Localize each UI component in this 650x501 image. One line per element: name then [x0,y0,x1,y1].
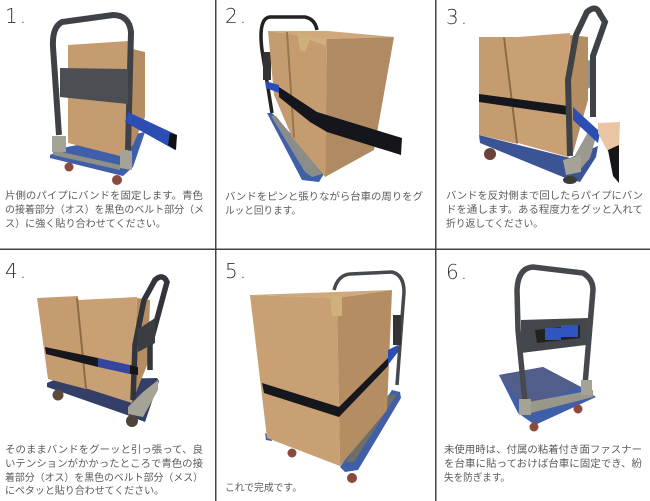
illustration: empty cart with stored fastener [499,267,596,432]
step number 5: 5. [225,259,248,283]
illustration: completed box strapped on cart [250,272,404,483]
description text: バンドを反対側まで回したらパイプにバン [446,189,643,202]
description text: いテンションがかかったところで青色の接 [5,457,203,470]
illustration: box on cart with black strap [261,17,402,182]
description text: バンドをピンと張りながら台車の周りをグ [225,190,423,203]
panel: step 4 [5,259,203,497]
panel: step 5 [225,259,404,494]
description text: 失を防ぎます。 [444,471,510,484]
illustration: cart with box and blue strap [50,15,177,185]
panel: step 3 [446,5,643,230]
description text: を台車に貼っておけば台車に固定でき、紛 [444,457,642,470]
description text: 未使用時は、付属の粘着付き面ファスナー [444,443,642,456]
step number 4: 4. [5,259,28,283]
step number 2: 2. [225,4,248,28]
step number 1: 1. [5,4,28,28]
description text [446,189,643,230]
description text: ドを通します。ある程度力をグッと入れて [446,203,643,216]
description text: 片側のパイプにバンドを固定します。青色 [5,189,203,202]
description text [444,443,642,484]
description text [5,189,204,230]
step number 6: 6. [446,260,469,284]
panel: step 6 [444,260,642,484]
panel: step 2 [225,4,423,217]
description text: 着部分（オス）を黒色のベルト部分（メス） [5,471,203,484]
description text: の接着部分（オス）を黒色のベルト部分（メ [5,203,204,216]
description text [225,190,423,217]
description text: ルッと回ります。 [225,205,301,217]
panel: step 1 [5,4,204,230]
description text: 折り返してください。 [446,217,543,230]
description text: これで完成です。 [225,482,302,494]
description text: ス）に強く貼り合わせてください。 [5,217,166,230]
description text: にペタッと貼り合わせてください。 [5,484,164,497]
step number 3: 3. [446,5,469,29]
description text: そのままバンドをグーッと引っ張って、良 [5,443,203,456]
illustration: strap fastened around boxes [37,277,167,427]
illustration: strap pulled through pipe by hand [479,8,620,184]
description text [5,443,203,497]
